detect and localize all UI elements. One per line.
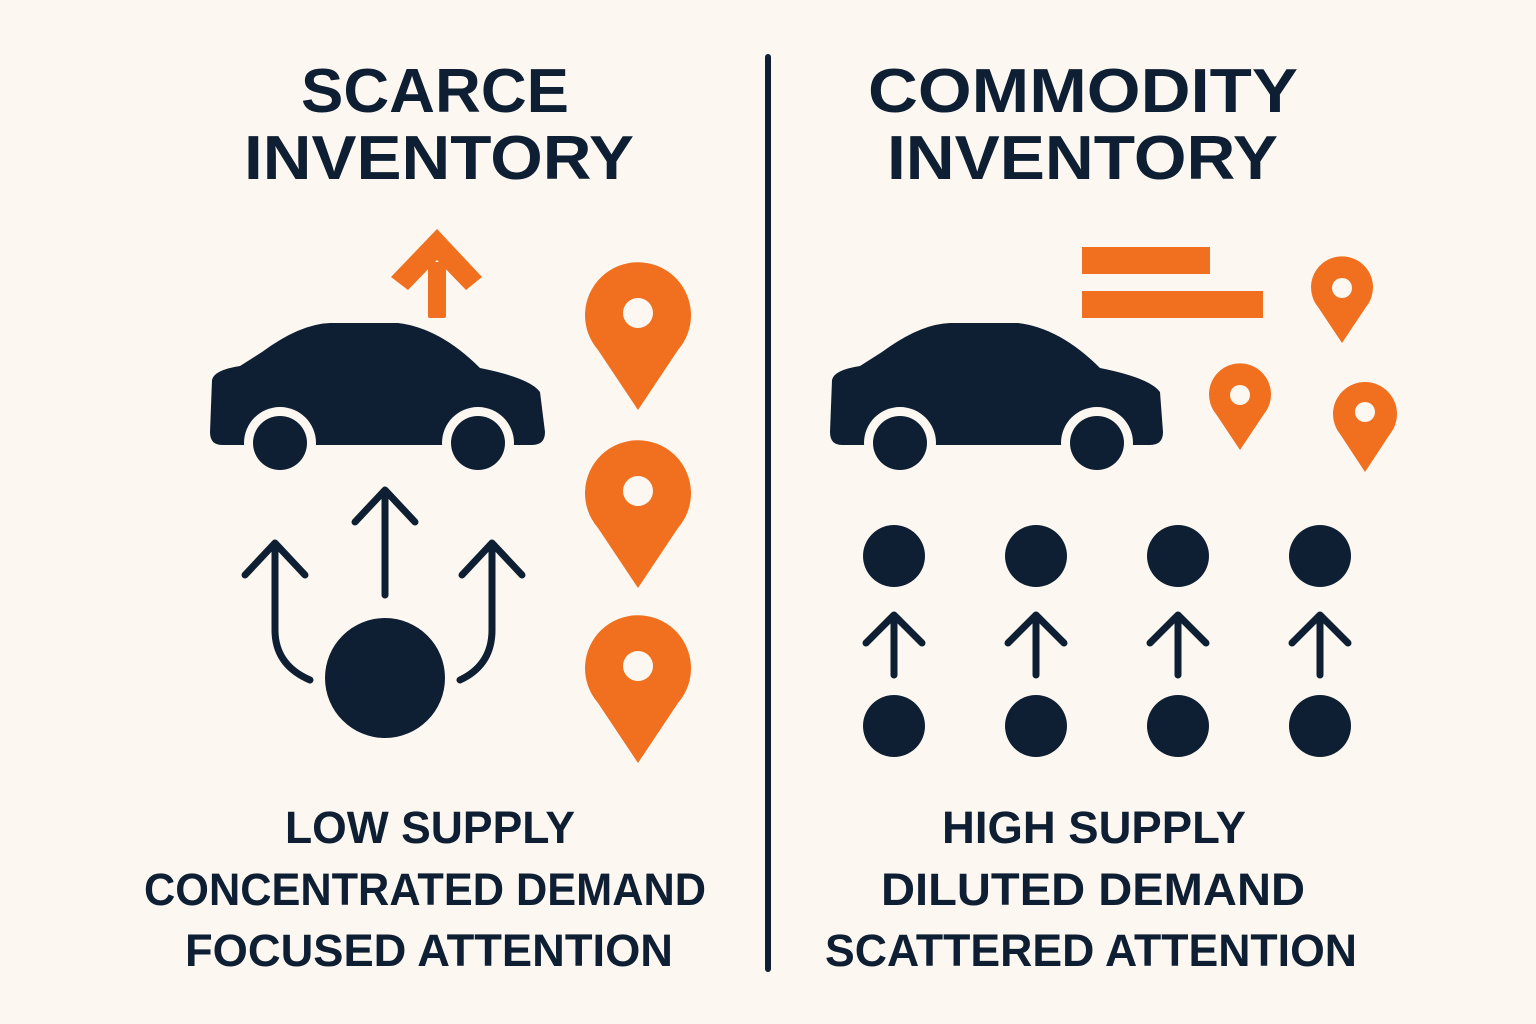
title: scarce inventory: SCARCE: [301, 57, 569, 126]
icon: car: [830, 323, 1163, 479]
text: commodity summary: SCATTERED ATTENTION: [825, 925, 1357, 976]
icon: orange up arrow: [391, 229, 482, 318]
text: scarce summary: CONCENTRATED DEMAND: [144, 864, 706, 915]
panel: commodity inventory: [825, 57, 1397, 976]
text: scarce summary: LOW SUPPLY: [285, 802, 575, 853]
icon: scattered dots and arrows: [863, 525, 1351, 757]
icon: single big circle: [325, 618, 445, 738]
icon: car: [210, 323, 545, 479]
text: commodity summary: HIGH SUPPLY: [942, 802, 1246, 853]
title: commodity inventory: [868, 57, 1298, 193]
title: scarce inventory: [244, 57, 634, 193]
text: commodity summary: DILUTED DEMAND: [881, 864, 1305, 915]
icon: focused demand arrows: [245, 490, 522, 680]
text: scarce summary: [144, 802, 706, 976]
icon: location pins: [585, 262, 691, 763]
title: commodity inventory: INVENTORY: [887, 124, 1278, 193]
text: commodity summary: [825, 802, 1357, 976]
text: scarce summary: FOCUSED ATTENTION: [185, 925, 673, 976]
icon: small location pins: [1209, 256, 1397, 472]
icon: orange bars: [1082, 247, 1263, 318]
panel: scarce inventory: [144, 57, 706, 976]
title: scarce inventory: INVENTORY: [244, 124, 634, 193]
title: commodity inventory: COMMODITY: [868, 57, 1298, 126]
